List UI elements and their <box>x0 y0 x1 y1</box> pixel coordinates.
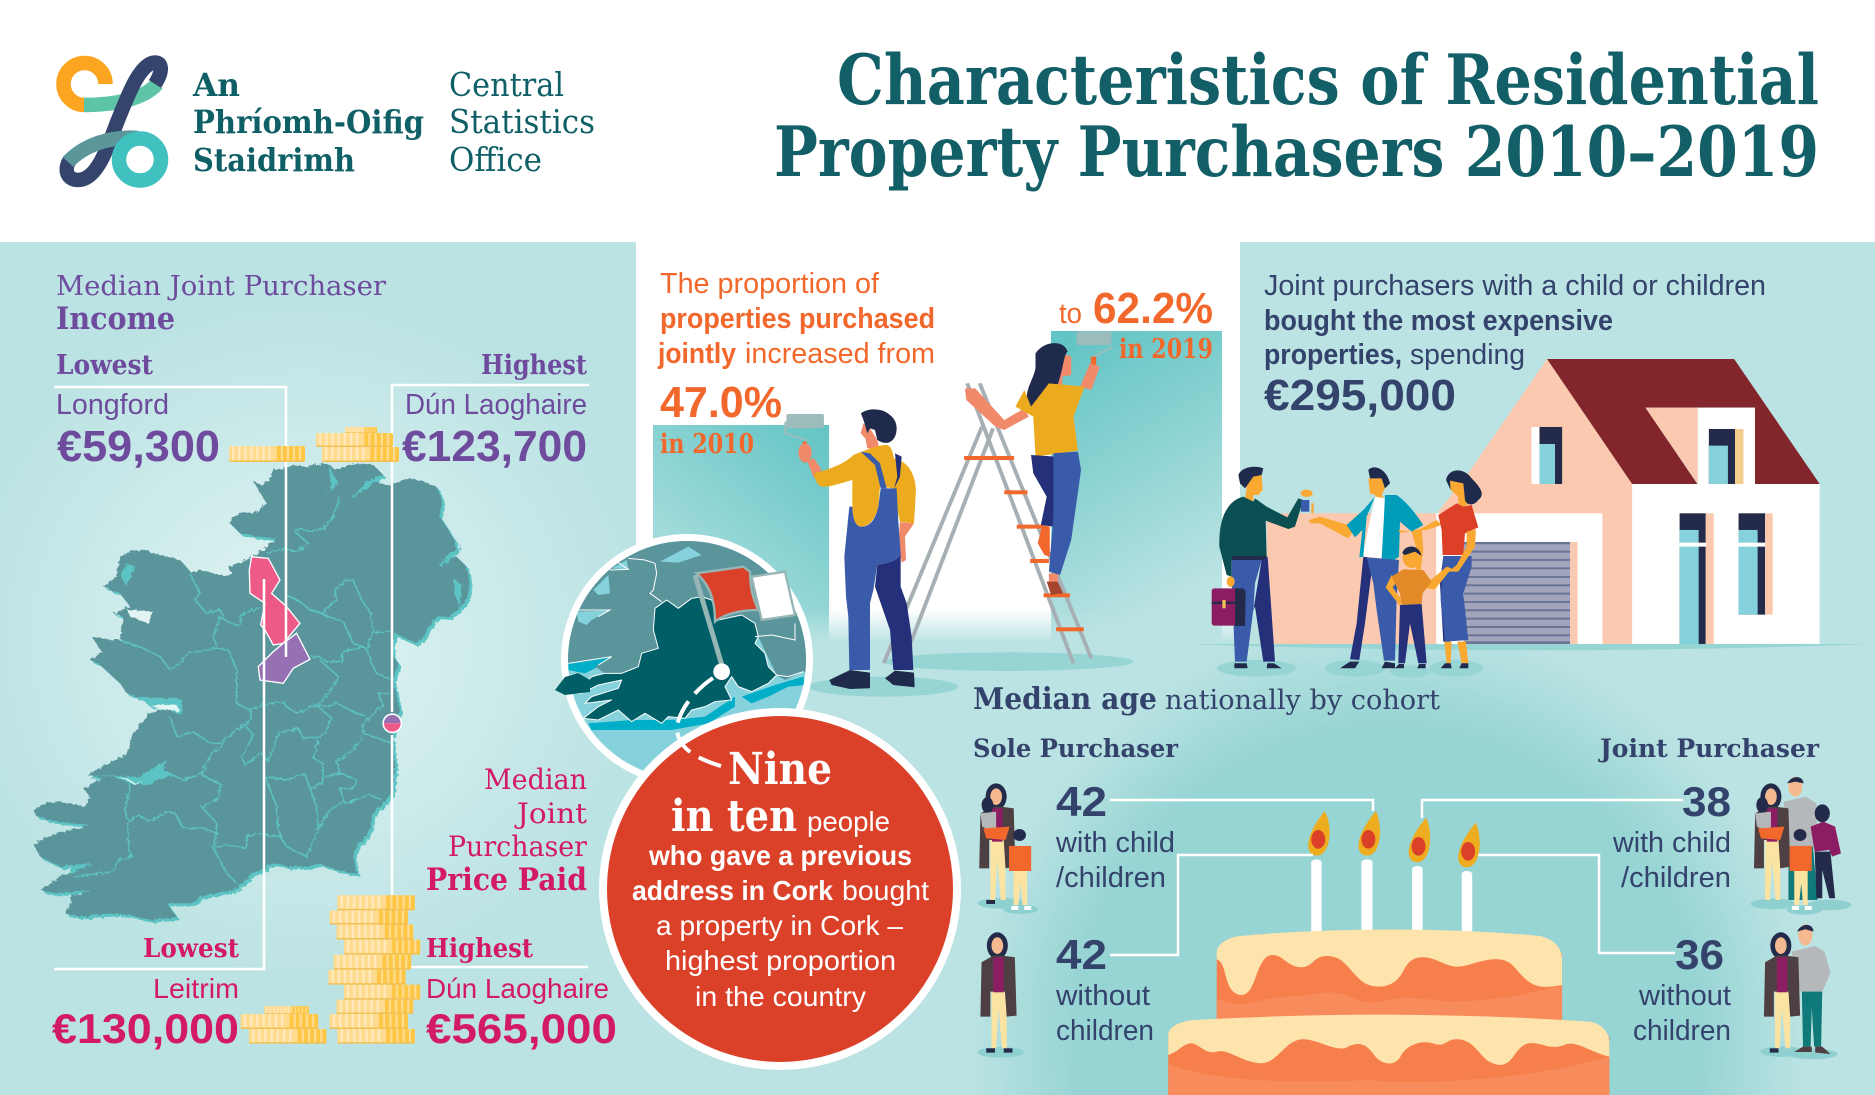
ladder <box>884 383 1091 663</box>
illustration: ladder and woman painting <box>786 332 1134 671</box>
price paid heading: Joint <box>514 797 588 830</box>
head <box>861 409 897 448</box>
coast edge <box>36 466 473 923</box>
price paid section <box>52 763 617 1052</box>
callout text <box>632 744 929 1012</box>
house purchase text: spending <box>1410 339 1525 371</box>
sole without children: without <box>1055 980 1150 1012</box>
joint without children: without <box>1638 980 1731 1012</box>
2019 value <box>1059 284 1213 365</box>
price paid lowest <box>52 934 239 1052</box>
2019 value: to <box>1059 298 1082 330</box>
bottom tier <box>1168 1015 1609 1095</box>
shirt <box>814 445 916 527</box>
roller held by man <box>786 414 824 453</box>
Dublin marker <box>382 713 402 733</box>
median age heading <box>973 682 1440 717</box>
callout: nine in ten <box>599 678 961 1070</box>
logo English name: Office <box>449 140 542 179</box>
price paid highest <box>426 934 617 1052</box>
income lowest: Lowest <box>56 350 153 381</box>
2010 value: 47.0% <box>660 378 782 427</box>
cyan coastal shelf <box>568 566 804 730</box>
house purchase text: Joint purchasers with a child or children <box>1264 270 1766 302</box>
estate agent <box>1212 467 1314 668</box>
intro text <box>657 268 935 370</box>
illustration: house <box>1189 359 1872 650</box>
house purchase text: bought the most expensive <box>1264 305 1613 337</box>
logo Irish name: An <box>192 66 240 104</box>
callout text: people <box>807 806 890 837</box>
price paid highest: Dún Laoghaire <box>426 973 609 1004</box>
icon: sole purchaser without children <box>978 932 1024 1058</box>
coins: income <box>229 427 399 462</box>
straps <box>861 452 887 488</box>
logo English name: Statistics <box>449 102 595 141</box>
income heading: Median Joint Purchaser <box>56 271 386 302</box>
inset map: Cork <box>555 530 822 788</box>
illustration: man painting <box>798 409 958 697</box>
title <box>774 40 1819 193</box>
neighbouring counties <box>568 541 806 680</box>
coins: price paid <box>241 895 420 1044</box>
sole with child: 42 <box>1056 778 1107 825</box>
logo mark <box>64 62 161 180</box>
intro text: increased from <box>745 338 935 370</box>
sole with child <box>1055 778 1175 894</box>
father <box>1309 467 1423 668</box>
price paid heading <box>426 763 588 898</box>
sole without children <box>1055 931 1154 1047</box>
income highest <box>402 350 587 471</box>
illustration: family and agent <box>1212 467 1483 678</box>
logo Irish name: Staidrimh <box>193 141 355 179</box>
income highest: Dún Laoghaire <box>405 389 587 421</box>
price paid lowest: Leitrim <box>153 973 239 1004</box>
2019 value: in 2019 <box>1119 334 1213 365</box>
icon: joint purchasers without children <box>1760 924 1837 1059</box>
intro text: properties purchased <box>660 303 935 335</box>
joint without children: children <box>1633 1015 1731 1047</box>
house body <box>1267 359 1820 644</box>
price paid heading: Price Paid <box>426 862 587 898</box>
joint with child <box>1612 778 1731 894</box>
price paid lowest: €130,000 <box>52 1005 239 1052</box>
callout text: bought <box>842 875 929 906</box>
back leg <box>875 553 913 670</box>
median age heading: Median age <box>973 682 1157 717</box>
joint with child: /children <box>1621 862 1731 894</box>
house purchase text <box>1264 270 1766 420</box>
income heading <box>56 271 386 337</box>
floor shadow <box>808 677 958 697</box>
callout text: a property in Cork – <box>656 910 903 941</box>
joint without children: 36 <box>1675 931 1724 978</box>
joint purchaser heading: Joint Purchaser <box>1598 734 1820 763</box>
income lowest: €59,300 <box>57 422 220 471</box>
floor shadow <box>884 652 1134 671</box>
sole without children: 42 <box>1056 931 1107 978</box>
income highest: €123,700 <box>402 422 587 471</box>
callout text: Nine <box>728 744 832 795</box>
county Leitrim highlight <box>249 557 300 645</box>
painters proportion text <box>657 268 1213 460</box>
sole with child: /children <box>1056 862 1166 894</box>
county borders <box>568 558 803 677</box>
price paid highest: €565,000 <box>426 1005 617 1052</box>
flames <box>1308 811 1480 867</box>
income lowest <box>56 350 220 471</box>
icon: sole purchaser with child <box>978 783 1038 914</box>
map of Ireland <box>33 463 473 923</box>
county Longford highlight <box>258 633 310 683</box>
joint with child: 38 <box>1682 778 1731 825</box>
boots <box>829 670 870 689</box>
income highest: Highest <box>481 350 587 381</box>
income lowest: Longford <box>56 389 169 421</box>
callout circle <box>599 708 961 1070</box>
logo English name: Central <box>449 65 564 104</box>
2010 value <box>660 378 782 460</box>
inset ring <box>561 534 813 786</box>
intro text: The proportion of <box>660 268 880 300</box>
callout text: in ten <box>671 791 797 842</box>
2019 value: 62.2% <box>1093 284 1213 333</box>
logo Irish name <box>192 66 424 179</box>
logo English name <box>449 65 595 179</box>
ground line <box>1189 644 1872 650</box>
price paid lowest: Lowest <box>143 934 239 964</box>
family shadows <box>1217 660 1483 678</box>
callout text: highest proportion <box>665 945 896 976</box>
joint with child: with child <box>1612 827 1731 859</box>
county Cork <box>555 597 777 723</box>
woman painting <box>965 332 1112 595</box>
intro text: jointly <box>657 338 736 370</box>
house purchase text: properties, <box>1264 339 1402 371</box>
income heading: Income <box>56 301 175 337</box>
icon: joint purchasers with children <box>1751 777 1851 915</box>
2010 value: in 2010 <box>660 429 754 460</box>
mother <box>1398 470 1482 668</box>
price paid heading: Purchaser <box>448 830 588 863</box>
joint without children <box>1633 931 1731 1047</box>
income section <box>56 271 587 471</box>
dashed route line <box>677 678 724 767</box>
land mass with county borders <box>33 463 470 920</box>
sole without children: children <box>1056 1015 1154 1047</box>
leader lines <box>54 385 589 969</box>
callout text: who gave a previous <box>648 840 912 871</box>
logo Irish name: Phríomh-Oifig <box>193 103 424 141</box>
age connector lines <box>1110 800 1683 955</box>
Cork peninsula over ring <box>555 673 590 695</box>
callout text: in the country <box>695 981 866 1012</box>
child <box>1386 547 1452 668</box>
arm and hand <box>798 442 914 563</box>
price paid highest: Highest <box>426 934 533 964</box>
median age heading: nationally by cohort <box>1165 685 1440 716</box>
top tier <box>1217 929 1562 1023</box>
inset map content <box>568 541 806 770</box>
price paid heading: Median <box>484 763 587 796</box>
overalls <box>844 488 901 670</box>
callout text: address in Cork <box>632 875 833 906</box>
joint purchaser column <box>1598 734 1820 1047</box>
candles <box>1311 859 1472 936</box>
house purchase text: €295,000 <box>1264 371 1456 420</box>
flag <box>695 567 795 680</box>
logo: Central Statistics Office <box>64 62 595 180</box>
sole purchaser heading: Sole Purchaser <box>973 734 1179 763</box>
sole purchaser column <box>973 734 1179 1047</box>
birthday cake <box>1168 811 1609 1095</box>
sole with child: with child <box>1055 827 1175 859</box>
